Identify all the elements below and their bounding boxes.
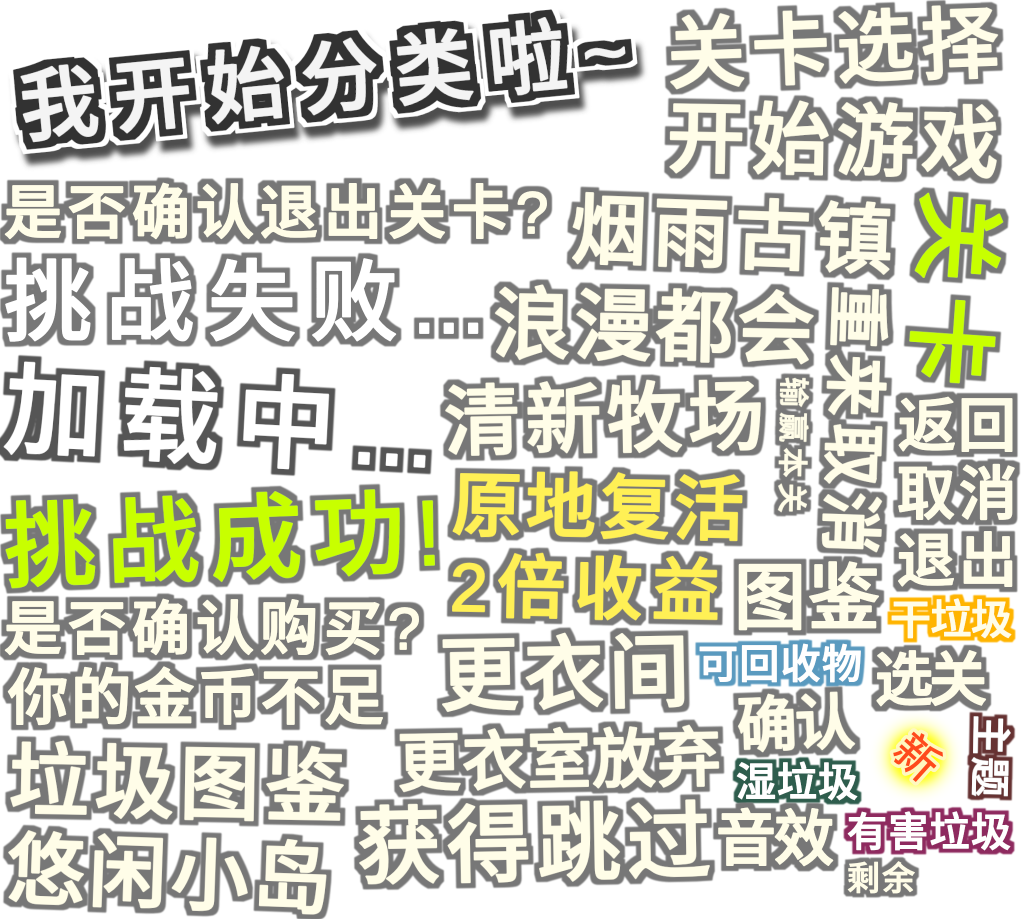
label: 垃圾图鉴: 垃圾图鉴 — [8, 737, 346, 832]
label: 关卡选择: 关卡选择 — [666, 0, 1000, 99]
label: 可回收物: 可回收物 — [698, 643, 862, 687]
icon: 新 glow badge: 新 — [883, 725, 949, 791]
label: 原地复活: 原地复活 — [451, 466, 745, 550]
label: 清新牧场: 清新牧场 — [443, 375, 765, 466]
label: 2倍收益: 2倍收益 — [449, 550, 721, 630]
label: 挑战失败...: 挑战失败... — [4, 253, 485, 352]
label: 取消: 取消 — [897, 462, 1017, 527]
label: 更衣室放弃: 更衣室放弃 — [396, 722, 722, 800]
label: 烟雨古镇: 烟雨古镇 — [569, 188, 894, 285]
label: 是否确认购买？: 是否确认购买? — [4, 597, 426, 662]
label: 输赢本关 vertical small: 输赢本关 — [774, 377, 809, 513]
label: 音效: 音效 — [716, 806, 834, 873]
label: 干垃圾: 干垃圾 — [890, 597, 1012, 643]
label: 你的金币不足: 你的金币不足 — [8, 665, 384, 732]
label: 退出: 退出 — [897, 529, 1017, 594]
label: 加载中...: 加载中... — [1, 355, 438, 489]
label: 获得跳过: 获得跳过 — [356, 795, 712, 895]
label: 主题 vertical: 主题 — [966, 715, 1012, 797]
label: 重来取消 vertical: 重来取消 — [813, 285, 892, 555]
label: 有害垃圾: 有害垃圾 — [847, 811, 1011, 855]
label: 确认: 确认 — [736, 689, 856, 760]
label: 剩余: 剩余 — [847, 860, 915, 897]
label: 是否确认退出关卡？: 是否确认退出关卡? — [4, 181, 554, 246]
label: 挑战成功！: 挑战成功! — [2, 482, 454, 600]
label: 图鉴: 图鉴 — [734, 559, 880, 639]
label: 选关: 选关 — [875, 648, 987, 713]
label: 开始游戏: 开始游戏 — [666, 94, 1000, 188]
label: 浪漫都会: 浪漫都会 — [492, 280, 816, 374]
label: 湿垃圾: 湿垃圾 — [736, 761, 858, 805]
label: 更衣间: 更衣间 — [438, 628, 690, 721]
label: 返回: 返回 — [898, 394, 1016, 459]
label: 关卡 green vertical: 关卡 — [895, 189, 1009, 389]
title: 我开始分类啦~: 我开始分类啦~ — [16, 6, 632, 152]
